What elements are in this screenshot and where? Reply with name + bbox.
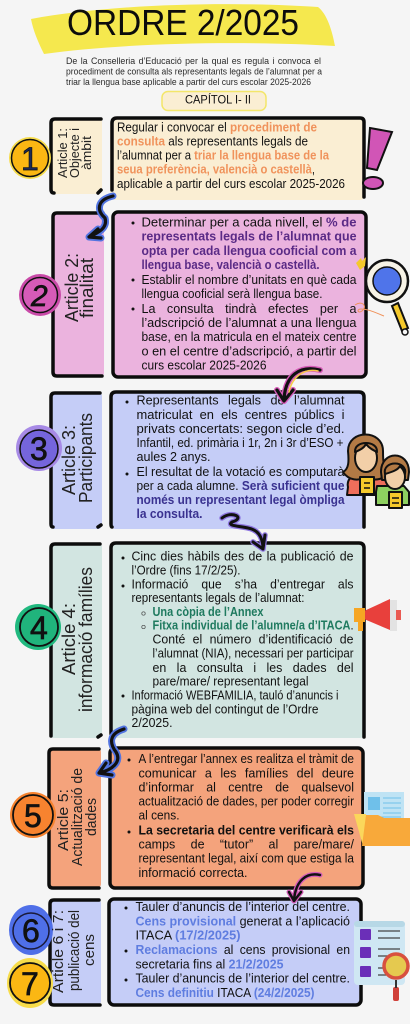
text box: articles 6 and 7: secretaria fins al 21/2/2025: [136, 958, 284, 972]
text box: articles 6 and 7: Cens definitiu ITACA (24/2/2025): [136, 986, 314, 1000]
panel: articles 6 and 7: [7, 899, 408, 1008]
text box: article 2: [113, 212, 366, 377]
arrow: article 5 to articles 6 and 7: [289, 874, 320, 901]
number badge 5: [10, 792, 56, 838]
text box: article 2: l’adscripció de l’alumnat a una llengua: [142, 316, 356, 330]
number badge 3: 3: [30, 431, 48, 467]
text box: article 1: l’alumnat per a triar la llengua base de la: [117, 148, 330, 162]
text box: article 4: l’alumnat (NIA), necessari per participar: [152, 646, 354, 660]
label box: article 3: [50, 392, 102, 529]
text box: article 4: l’Ordre (fins 17/2/25).: [132, 564, 240, 578]
number badge 2: 2: [30, 280, 48, 313]
arrow: article 4 to article 5: [99, 729, 124, 775]
woman: [343, 434, 391, 495]
number badge 6: [9, 905, 53, 955]
text box: articles 6 and 7: ITACA (17/2/2025): [136, 928, 240, 942]
label box: article 3: Participants: [76, 413, 96, 503]
text box: article 2: curs escolar 2025-2026: [142, 358, 266, 372]
icon: two family members: [343, 434, 409, 508]
text box: article 2: Determinar per a cada nivell, el % de: [142, 216, 356, 230]
panel: article 4: [15, 543, 401, 738]
arrow: article 1 to article 2: [89, 196, 113, 238]
text box: article 4: Informació WEBFAMILIA, tauló d’anuncis i: [132, 688, 338, 702]
text box: article 3: Representants legals de l’alumnat: [136, 394, 345, 408]
text box: articles 6 and 7: Reclamacions al cens provisional en: [136, 943, 350, 957]
label box: article 4: Article 4:: [59, 603, 79, 675]
text box: article 4: pàgina web del contingut de l’Ordre: [132, 702, 318, 716]
label box: articles 6 and 7: [50, 899, 101, 1005]
text box: article 3: privats concertats: segon cicle d’ed.: [136, 422, 344, 436]
label box: article 2: [52, 212, 104, 377]
text box: article 5: camps de “tutor” al pare/mare/: [138, 838, 354, 852]
number badge 1: [9, 137, 51, 179]
label box: article 2: finalitat: [77, 258, 97, 318]
text box: article 2: o en el centre d’adscripció, a partir del: [142, 344, 356, 358]
text box: article 3: Infantil, ed. primària i 1r, 2n i 3r d’ESO +: [136, 436, 344, 450]
text box: article 2: La consulta tindrà efectes per a: [142, 302, 356, 316]
subtitle: De la Conselleria d’Educació per la qual es regula i convoca el: [66, 56, 321, 66]
text box: article 2: opta per cada llengua cooficial com a: [142, 244, 357, 258]
title with yellow brush highlight: [31, 2, 335, 54]
text box: article 2: base, en la matricula en el mateix centre: [142, 330, 356, 344]
text box: article 2: llengua cooficial serà llengua base.: [142, 287, 322, 301]
label text: articles 6 and 7: publicació del: [67, 910, 83, 991]
text box: article 4: pare/mare/ representant legal: [152, 674, 308, 688]
text box: article 5: [110, 748, 363, 888]
label box: article 5: Article 5:: [56, 789, 72, 851]
number badge 3: [16, 425, 62, 471]
arrow: article 3 to article 4: [222, 515, 265, 549]
icon: magnifying glass: [355, 257, 408, 335]
text box: article 3: El resultat de la votació es computarà: [136, 465, 344, 479]
text box: article 4: representants legals de l’alumnat:: [132, 591, 304, 605]
text box: articles 6 and 7: Tauler d’anuncis de l’interior del centre.: [136, 900, 350, 914]
text box: article 3: aules 2 anys.: [136, 450, 210, 464]
text box: article 1: Regular i convocar el procediment de: [117, 120, 317, 134]
text box: article 4: Conté el número d’identificació de: [152, 632, 354, 646]
text box: article 5: A l’entregar l’annex es realitza el tràmit de: [138, 752, 354, 766]
label text: articles 6 and 7: Article 6 i 7:: [51, 910, 67, 993]
chapter pill: [162, 92, 266, 110]
text box: article 3: matriculat en els centres públics i: [136, 408, 344, 422]
text box: article 1: consulta als representants legals de: [117, 134, 308, 148]
number badge 6: 6: [22, 913, 40, 949]
text box: article 1: [110, 118, 365, 200]
label text: articles 6 and 7: cens: [82, 934, 98, 966]
text box: article 5: representant legal, així com que estiga la: [138, 852, 354, 866]
label box: article 1: Objecte i: [67, 128, 82, 178]
number badge 2: [19, 274, 61, 316]
text box: article 5: d’informar al centre de qualsevol: [138, 780, 354, 794]
label box: article 1: [50, 118, 102, 194]
subtitle: [66, 56, 322, 87]
text box: articles 6 and 7: Tauler d’anuncis de l’interior del centre.: [136, 972, 350, 986]
text box: article 3: la consulta.: [136, 507, 202, 521]
text box: article 5: al cens.: [138, 808, 180, 822]
text box: article 3: [110, 392, 365, 529]
text box: article 2: Establir el nombre d’unitats en què cada: [142, 273, 356, 287]
text box: article 4: en la consulta i les dades del: [152, 661, 354, 675]
panel: article 5: [10, 748, 410, 888]
number badge 4: 4: [30, 610, 48, 646]
number badge 4: [15, 604, 61, 650]
panel: article 1: [9, 118, 392, 200]
label box: article 5: dades: [84, 798, 100, 836]
number badge 1: 1: [21, 141, 39, 177]
number badge 7: 7: [21, 966, 39, 1002]
text box: article 5: comunicar a les famílies del deure: [138, 766, 354, 780]
text box: article 3: per a cada alumne. Serà suficient que: [136, 479, 344, 493]
subtitle: triar la llengua base aplicable a partir del curs escolar 2025-2026: [66, 77, 311, 87]
arrow: article 2 to article 3: [277, 369, 320, 401]
man: [376, 456, 409, 508]
subtitle: procediment de consulta als representants legals de l’alumnat per a: [66, 66, 322, 76]
chapter pill: CAPÍTOL I- II: [185, 94, 251, 106]
text box: articles 6 and 7: [109, 899, 361, 1005]
label box: article 5: [49, 748, 101, 888]
text box: article 1: aplicable a partir del curs escolar 2025-2026: [117, 177, 345, 191]
label box: article 4: [50, 543, 102, 738]
label box: article 1: Article 1:: [55, 128, 70, 178]
label box: article 5: Actualització de: [70, 768, 86, 866]
label text: articles 6 and 7: [51, 910, 98, 993]
label box: article 4: informació famílies: [76, 567, 96, 712]
text box: article 5: actualització de dades, per poder corregir: [138, 794, 354, 808]
text box: article 2: representats legals de l’alumnat que: [142, 230, 356, 244]
text box: article 1: seua preferència, valencià o castellà,: [117, 162, 315, 176]
label box: article 2: Article 2:: [62, 253, 82, 322]
text box: article 4: Informació que s’ha d’entregar als: [132, 578, 354, 592]
icon: checklist with magnifier: [354, 921, 408, 1001]
text box: article 5: La secretaria del centre verificarà els: [138, 824, 354, 838]
icon: exclamation mark: [363, 128, 392, 189]
number badge 7: [7, 958, 53, 1008]
text box: article 2: llengua base, valencià o castellà.: [142, 258, 320, 272]
text box: articles 6 and 7: Cens provisional generat a l’aplicació: [136, 914, 350, 928]
text box: article 3: només un representant legal òmpliga: [136, 493, 345, 507]
label box: article 1: àmbit: [79, 136, 94, 170]
text box: article 4: Una còpia de l’Annex: [152, 605, 264, 619]
icon: folder with document: [354, 792, 410, 846]
title with yellow brush highlight: ORDRE 2/2025: [67, 2, 299, 43]
panel: article 2: [19, 212, 408, 377]
icon: megaphone: [354, 599, 401, 631]
text box: article 4: Fitxa individual de l’alumne/a d’ITACA.: [152, 618, 354, 632]
number badge 5: 5: [24, 798, 42, 834]
panel: article 3: [16, 392, 409, 529]
text box: article 4: 2/2025.: [132, 716, 172, 730]
label box: article 3: Article 3:: [59, 425, 79, 495]
text box: article 4: [110, 543, 365, 738]
text box: article 4: Cinc dies hàbils des de la publicació de: [132, 550, 354, 564]
text box: article 5: informació correcta.: [138, 866, 248, 880]
